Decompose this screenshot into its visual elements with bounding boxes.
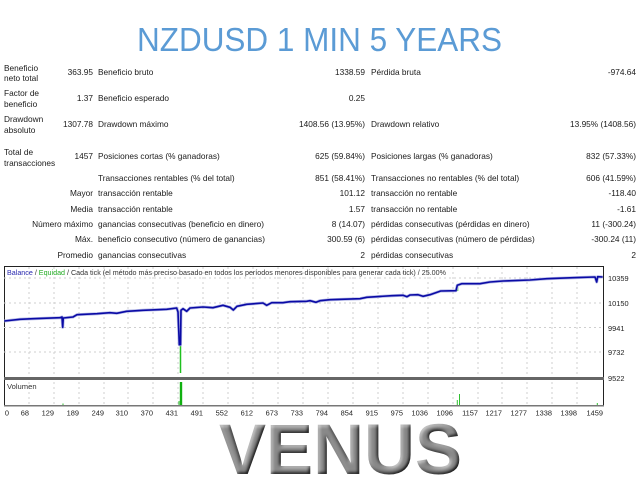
row: factor de beneficio: 1.37 bbox=[77, 93, 93, 103]
row: drawdown: 1408.56 (13.95%) bbox=[299, 119, 365, 129]
x axis labels: 1036 bbox=[412, 408, 428, 418]
row: transacciones rentables: 606 (41.59%) bbox=[586, 173, 636, 183]
x axis labels: 552 bbox=[216, 408, 228, 418]
x axis labels: 1096 bbox=[437, 408, 453, 418]
y axis labels: 9732 bbox=[608, 348, 624, 357]
x axis labels bbox=[5, 408, 603, 418]
row: media bbox=[70, 204, 636, 214]
row: total de transacciones: 625 (59.84%) bbox=[315, 151, 365, 161]
row: factor de beneficio: Beneficio esperado bbox=[98, 93, 169, 103]
row: drawdown bbox=[4, 114, 636, 135]
row: numero maximo bbox=[32, 219, 636, 229]
row: drawdown: Drawdown relativo bbox=[371, 119, 440, 129]
row: total de transacciones: transacciones bbox=[4, 158, 55, 168]
row: drawdown: Drawdown máximo bbox=[98, 119, 169, 129]
x axis labels: 794 bbox=[316, 408, 328, 418]
row: promedio: 2 bbox=[360, 250, 365, 260]
row: mayor: transacción no rentable bbox=[371, 188, 458, 198]
x axis labels: 975 bbox=[391, 408, 403, 418]
row: max beneficio: beneficio consecutivo (número de ganancias) bbox=[98, 234, 265, 244]
row: promedio: Promedio bbox=[57, 250, 93, 260]
row: drawdown: 1307.78 bbox=[63, 119, 93, 129]
title: NZDUSD 1 MIN 5 YEARS bbox=[137, 21, 502, 58]
row: mayor: transacción rentable bbox=[98, 188, 173, 198]
chart legend: Balance / Equidad / Cada tick (el método más preciso basado en todos los períodos menores disponibles para generar cada tick) / 25.00% bbox=[7, 268, 446, 277]
x axis labels: 431 bbox=[166, 408, 178, 418]
row: media: transacción no rentable bbox=[371, 204, 458, 214]
row: numero maximo: pérdidas consecutivas (pérdidas en dinero) bbox=[371, 219, 530, 229]
row: media: transacción rentable bbox=[98, 204, 173, 214]
row: max beneficio: 300.59 (6) bbox=[327, 234, 365, 244]
row: transacciones rentables: Transacciones rentables (% del total) bbox=[98, 173, 235, 183]
y axis labels bbox=[608, 274, 629, 383]
row: total de transacciones: 1457 bbox=[75, 151, 93, 161]
row: mayor bbox=[70, 188, 636, 198]
row: max beneficio bbox=[75, 234, 636, 244]
y axis labels: 10359 bbox=[608, 274, 629, 283]
row: max beneficio: pérdidas consecutivas (número de pérdidas) bbox=[371, 234, 535, 244]
x axis labels: 129 bbox=[42, 408, 54, 418]
volume bars bbox=[180, 382, 182, 405]
row: factor de beneficio bbox=[4, 88, 365, 109]
row: media: 1.57 bbox=[349, 204, 365, 214]
x axis labels: 1338 bbox=[536, 408, 552, 418]
x axis labels: 0 bbox=[5, 408, 9, 418]
row: max beneficio: Máx. bbox=[75, 234, 93, 244]
row: beneficio: 363.95 bbox=[68, 67, 93, 77]
x axis labels: 1277 bbox=[511, 408, 527, 418]
x axis labels: 189 bbox=[67, 408, 79, 418]
volume divider bbox=[4, 377, 604, 380]
row: total de transacciones: Posiciones largas (% ganadoras) bbox=[371, 151, 493, 161]
row: drawdown: Drawdown bbox=[4, 114, 44, 124]
row: promedio: ganancias consecutivas bbox=[98, 250, 186, 260]
row: beneficio: Pérdida bruta bbox=[371, 67, 421, 77]
balance line bbox=[4, 277, 603, 345]
x axis labels: 249 bbox=[92, 408, 104, 418]
equity line bbox=[180, 285, 458, 373]
x axis labels: 1459 bbox=[587, 408, 603, 418]
x axis labels: 612 bbox=[241, 408, 253, 418]
row: mayor: 101.12 bbox=[340, 188, 365, 198]
x axis labels: 1157 bbox=[462, 408, 478, 418]
row: numero maximo: 11 (-300.24) bbox=[591, 219, 636, 229]
row: factor de beneficio: beneficio bbox=[4, 99, 38, 109]
row: numero maximo: 8 (14.07) bbox=[332, 219, 365, 229]
row: transacciones rentables bbox=[98, 173, 636, 183]
balance chart bbox=[4, 266, 604, 406]
row: promedio: 2 bbox=[631, 250, 636, 260]
statistics table bbox=[4, 63, 636, 260]
x axis labels: 733 bbox=[291, 408, 303, 418]
x axis labels: 68 bbox=[21, 408, 29, 418]
x axis labels: 854 bbox=[341, 408, 353, 418]
row: beneficio: Beneficio bruto bbox=[98, 67, 154, 77]
row: mayor: Mayor bbox=[70, 188, 93, 198]
x axis labels: 1217 bbox=[486, 408, 502, 418]
volume label: Volumen bbox=[7, 382, 37, 391]
y axis labels: 9941 bbox=[608, 324, 624, 333]
row: factor de beneficio: Factor de bbox=[4, 88, 39, 98]
row: drawdown: absoluto bbox=[4, 125, 36, 135]
row: promedio bbox=[57, 250, 636, 260]
row: total de transacciones: 832 (57.33%) bbox=[586, 151, 636, 161]
x axis labels: 1398 bbox=[561, 408, 577, 418]
row: beneficio: 1338.59 bbox=[335, 67, 365, 77]
row: mayor: -118.40 bbox=[608, 188, 636, 198]
row: beneficio bbox=[4, 63, 636, 83]
x axis labels: 491 bbox=[191, 408, 203, 418]
row: media: -1.61 bbox=[617, 204, 636, 214]
row: media: Media bbox=[70, 204, 93, 214]
y axis labels: 10150 bbox=[608, 299, 629, 308]
x axis labels: 370 bbox=[141, 408, 153, 418]
row: total de transacciones: Posiciones cortas (% ganadoras) bbox=[98, 151, 220, 161]
row: drawdown: 13.95% (1408.56) bbox=[570, 119, 636, 129]
row: numero maximo: Número máximo bbox=[32, 219, 93, 229]
y axis labels: 9522 bbox=[608, 374, 624, 383]
row: beneficio: Beneficio bbox=[4, 63, 39, 73]
row: beneficio: neto total bbox=[4, 73, 38, 83]
row: total de transacciones: Total de bbox=[4, 147, 33, 157]
row: transacciones rentables: 851 (58.41%) bbox=[315, 173, 365, 183]
row: max beneficio: -300.24 (11) bbox=[591, 234, 636, 244]
x axis labels: 915 bbox=[366, 408, 378, 418]
x axis labels: 310 bbox=[116, 408, 128, 418]
x axis baseline bbox=[4, 405, 604, 406]
row: promedio: pérdidas consecutivas bbox=[371, 250, 453, 260]
row: numero maximo: ganancias consecutivas (beneficio en dinero) bbox=[98, 219, 264, 229]
row: transacciones rentables: Transacciones no rentables (% del total) bbox=[371, 173, 519, 183]
x axis labels: 673 bbox=[266, 408, 278, 418]
row: total de transacciones bbox=[4, 147, 636, 168]
row: factor de beneficio: 0.25 bbox=[349, 93, 365, 103]
row: beneficio: -974.64 bbox=[608, 67, 636, 77]
